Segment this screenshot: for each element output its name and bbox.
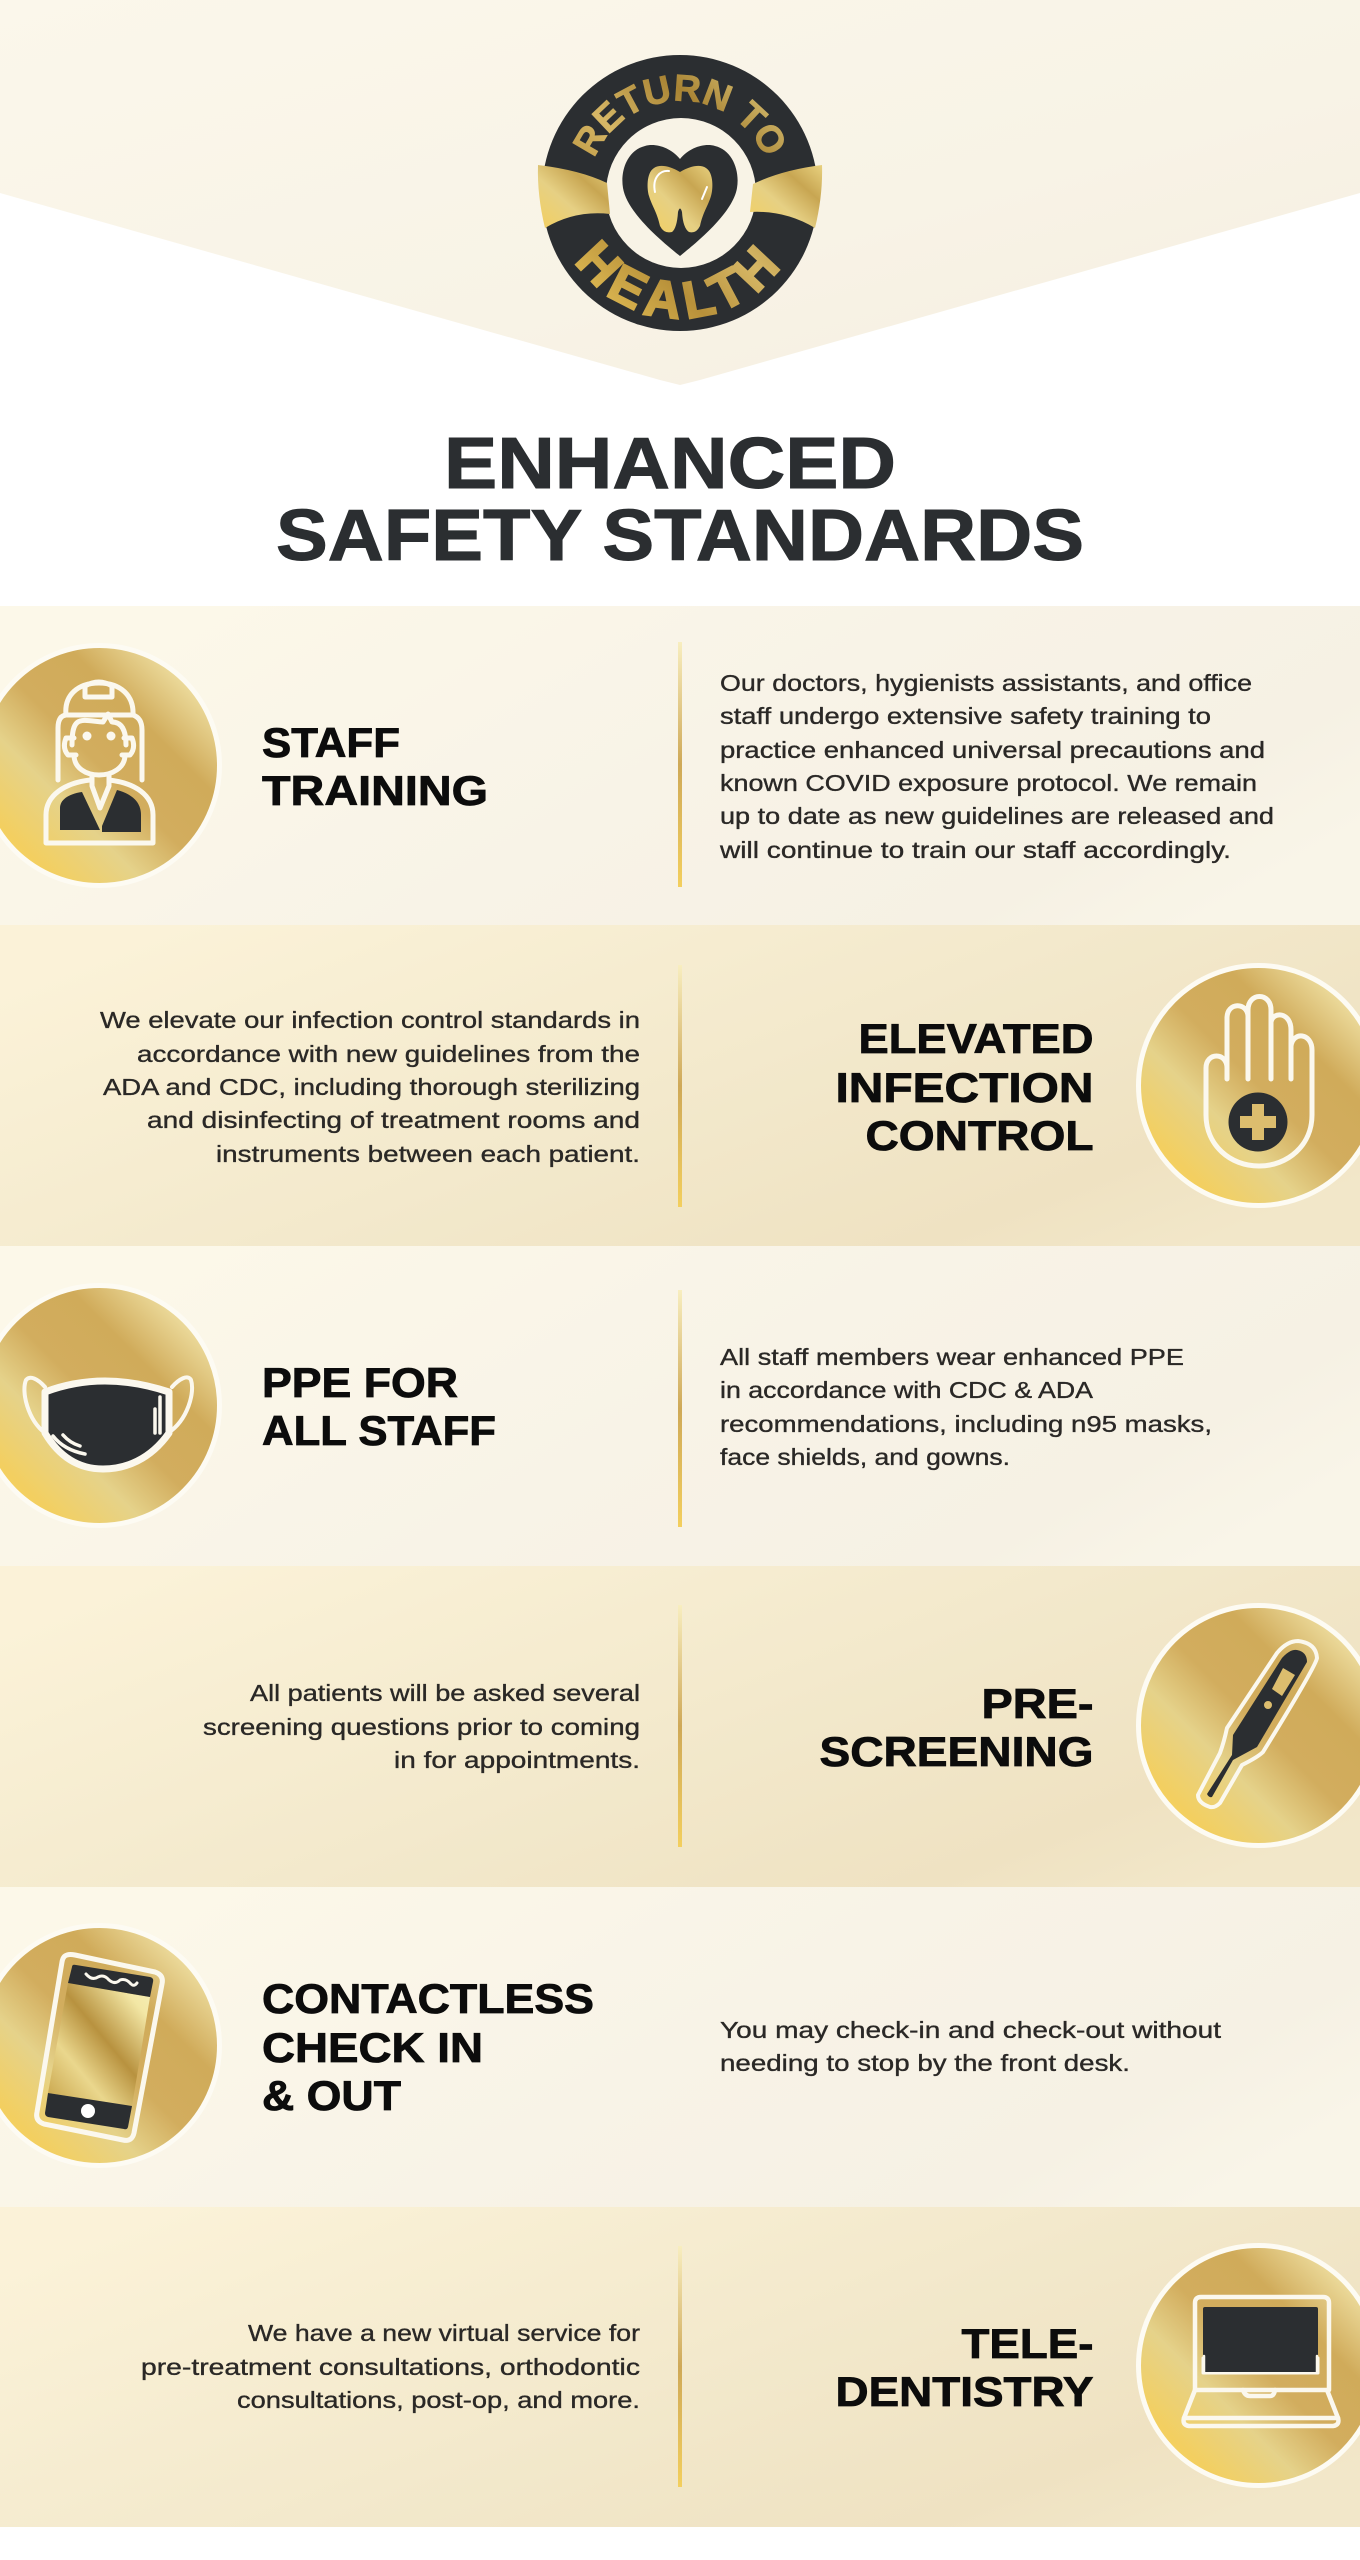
- header chevron background: [0, 0, 1360, 385]
- heading: PPE FOR: [262, 1359, 458, 1406]
- heading: TRAINING: [262, 767, 488, 814]
- heading: CONTACTLESS: [262, 1975, 594, 2022]
- body text: We have a new virtual service for: [248, 2320, 640, 2346]
- body text: All patients will be asked several: [250, 1680, 640, 1706]
- heading: ALL STAFF: [262, 1407, 496, 1454]
- body text: pre-treatment consultations, orthodontic: [141, 2354, 640, 2380]
- heading: [262, 719, 488, 814]
- body text: and disinfecting of treatment rooms and: [147, 1107, 640, 1133]
- icon: smartphone: [0, 1926, 220, 2166]
- panel: ppe for all staff: [0, 1246, 1360, 1566]
- heading: [820, 1680, 1094, 1775]
- icon: raised hand with medical cross: [1138, 966, 1360, 1206]
- panel: teledentistry: [0, 2207, 1360, 2527]
- title: SAFETY STANDARDS: [276, 496, 1084, 576]
- logo text: return to: RETURN TO: [572, 74, 784, 156]
- body text: All staff members wear enhanced PPE: [720, 1344, 1184, 1370]
- body text: screening questions prior to coming: [203, 1714, 640, 1740]
- heading: & OUT: [262, 2072, 401, 2119]
- body text: ADA and CDC, including thorough sterilizing: [103, 1074, 640, 1100]
- panel: pre-screening: [0, 1566, 1360, 1887]
- body text: consultations, post-op, and more.: [237, 2387, 640, 2413]
- body text: [100, 1007, 640, 1167]
- logo ribbon left: [538, 165, 610, 228]
- body text: staff undergo extensive safety training to: [720, 703, 1211, 729]
- heading: [836, 2320, 1094, 2415]
- panel: contactless check in and out: [0, 1887, 1360, 2207]
- heading: STAFF: [262, 719, 400, 766]
- body text: recommendations, including n95 masks,: [720, 1411, 1212, 1437]
- heading: DENTISTRY: [836, 2368, 1094, 2415]
- body text: in for appointments.: [394, 1747, 640, 1773]
- body text: [141, 2320, 640, 2413]
- panel: staff training: [0, 606, 1360, 925]
- heading: CONTROL: [866, 1112, 1094, 1159]
- body text: practice enhanced universal precautions and: [720, 737, 1265, 763]
- heading: [262, 1975, 594, 2119]
- body text: accordance with new guidelines from the: [137, 1041, 640, 1067]
- icon: staff member: [0, 646, 220, 886]
- panel: elevated infection control: [0, 925, 1360, 1246]
- body text: face shields, and gowns.: [720, 1444, 1010, 1470]
- logo: return to health badge: [538, 55, 822, 331]
- body text: up to date as new guidelines are released and: [720, 803, 1274, 829]
- title: ENHANCED: [444, 424, 896, 504]
- body text: will continue to train our staff accordingly.: [719, 837, 1231, 863]
- heading: SCREENING: [820, 1728, 1094, 1775]
- heading: ELEVATED: [858, 1015, 1094, 1062]
- icon: face mask: [0, 1286, 220, 1526]
- logo tooth: [648, 166, 712, 232]
- body text: [203, 1680, 640, 1773]
- body text: We elevate our infection control standards in: [100, 1007, 640, 1033]
- body text: instruments between each patient.: [216, 1141, 640, 1167]
- body text: [720, 2017, 1222, 2076]
- heading: PRE-: [982, 1680, 1094, 1727]
- body text: [720, 1344, 1212, 1470]
- body text: Our doctors, hygienists assistants, and office: [720, 670, 1252, 696]
- heading: CHECK IN: [262, 2024, 483, 2071]
- heading: [262, 1359, 496, 1454]
- body text: needing to stop by the front desk.: [720, 2050, 1130, 2076]
- logo ribbon right: [750, 165, 822, 228]
- body text: in accordance with CDC & ADA: [720, 1377, 1093, 1403]
- title: [276, 424, 1084, 576]
- body text: [719, 670, 1274, 863]
- icon: laptop: [1138, 2246, 1360, 2486]
- icon: thermometer: [1138, 1606, 1360, 1846]
- logo text: health: HEALTH: [574, 238, 781, 320]
- body text: known COVID exposure protocol. We remain: [720, 770, 1257, 796]
- heading: TELE-: [962, 2320, 1094, 2367]
- heading: INFECTION: [836, 1064, 1094, 1111]
- logo heart: [622, 145, 738, 256]
- body text: You may check-in and check-out without: [720, 2017, 1222, 2043]
- heading: [836, 1015, 1094, 1159]
